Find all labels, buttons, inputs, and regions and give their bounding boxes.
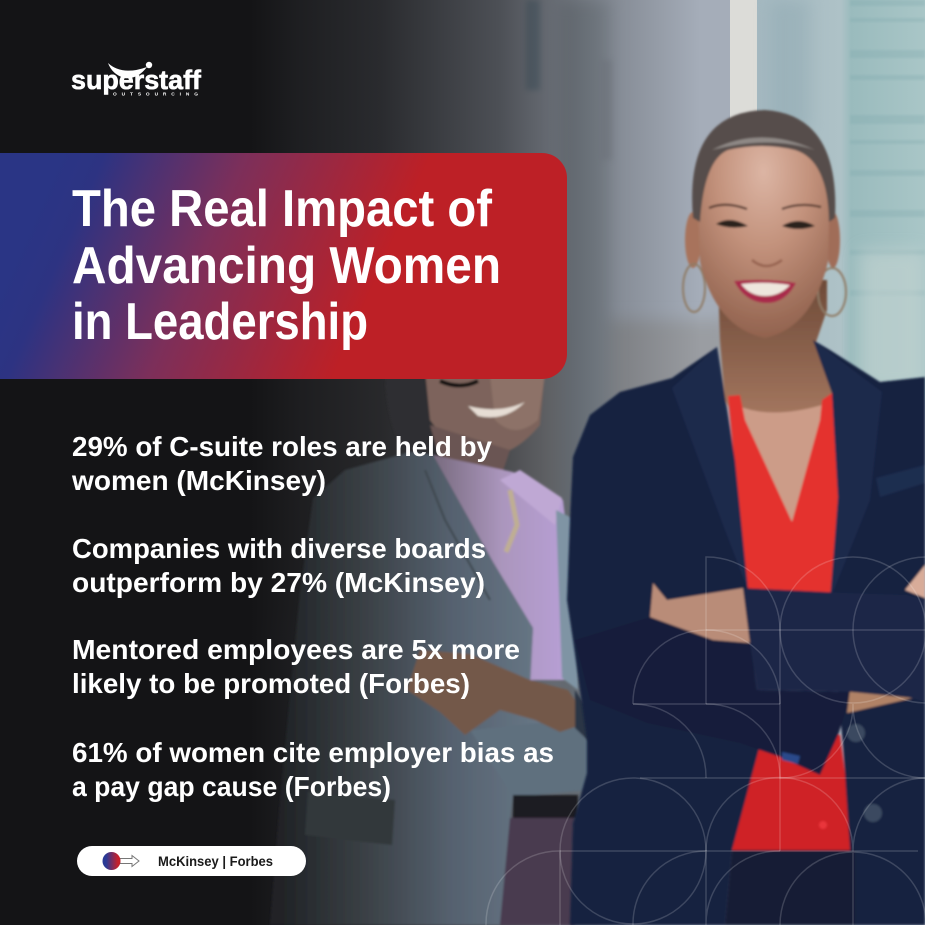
older woman cuff [575, 690, 625, 752]
lower crossed sleeve [575, 617, 852, 775]
ears [685, 212, 701, 268]
blazer right lapel [813, 340, 882, 597]
older woman neck [430, 425, 510, 480]
title text: The Real Impact of [72, 180, 493, 238]
blazer pocket [876, 465, 925, 497]
smile [734, 280, 796, 303]
icon: gradient dot with arrow [102, 852, 139, 870]
stat: mentoring [72, 634, 520, 699]
stat: diverse boards: outperform by 27% (McKinsey) [72, 567, 485, 598]
older woman hair [385, 370, 450, 460]
stat: mentoring: Mentored employees are 5x more [72, 634, 520, 665]
older woman belt and skirt [513, 795, 578, 818]
photo: older woman in grey blazer [270, 370, 625, 925]
eyebrows [709, 205, 821, 209]
older woman hand [407, 650, 590, 735]
stat: C-suite: 29% of C-suite roles are held by [72, 431, 492, 462]
older woman smile [468, 402, 525, 417]
stat: pay gap: 61% of women cite employer bias as [72, 737, 554, 768]
stat: mentoring: likely to be promoted (Forbes) [72, 668, 470, 699]
stat: diverse boards [72, 533, 486, 598]
older woman lilac shirt [433, 455, 573, 680]
stat: C-suite [71, 431, 492, 496]
blazer left lapel [672, 347, 748, 590]
cuff [782, 752, 800, 764]
older woman glasses [440, 381, 478, 386]
statistics text list [71, 431, 554, 802]
eyes [716, 220, 815, 229]
trousers [725, 850, 855, 925]
neck [718, 280, 838, 525]
left hand [650, 583, 750, 643]
title text: Advancing Women [72, 237, 501, 295]
logo [71, 62, 202, 98]
source text: McKinsey | Forbes [158, 854, 273, 869]
upper crossed sleeve [743, 588, 925, 702]
older woman necklace [506, 490, 517, 552]
older woman lapel line [425, 470, 490, 600]
wrist [847, 690, 913, 713]
right hand [905, 565, 925, 598]
logo figure head [146, 62, 152, 68]
source pill [77, 846, 306, 876]
lower red blouse [732, 735, 855, 852]
upper red blouse [728, 393, 838, 600]
logo swoosh [108, 63, 147, 78]
hoop earrings [683, 264, 846, 316]
blazer buttons [847, 724, 865, 742]
title text [72, 180, 501, 351]
geometric line pattern [486, 557, 925, 925]
title banner [0, 153, 567, 379]
stat: C-suite: women (McKinsey) [71, 465, 326, 496]
stat: pay gap: a pay gap cause (Forbes) [72, 771, 391, 802]
logo wordmark: superstaff [71, 65, 202, 95]
hair [692, 110, 835, 222]
older woman pocket [305, 792, 395, 845]
older woman face [425, 370, 545, 455]
nose [752, 260, 782, 266]
older woman blue collar strip [556, 510, 578, 690]
stat: pay gap [72, 737, 554, 802]
logo tagline: OUTSOURCING [113, 92, 198, 98]
navy blazer left body [567, 347, 760, 925]
photo: smiling woman in navy blazer [567, 110, 925, 925]
stat: diverse boards: Companies with diverse boards [72, 533, 486, 564]
older woman blazer [270, 452, 580, 925]
face [697, 125, 830, 338]
chest [736, 405, 822, 522]
navy blazer right body [813, 340, 925, 925]
older woman forearm [470, 720, 612, 797]
title text: in Leadership [72, 293, 368, 351]
